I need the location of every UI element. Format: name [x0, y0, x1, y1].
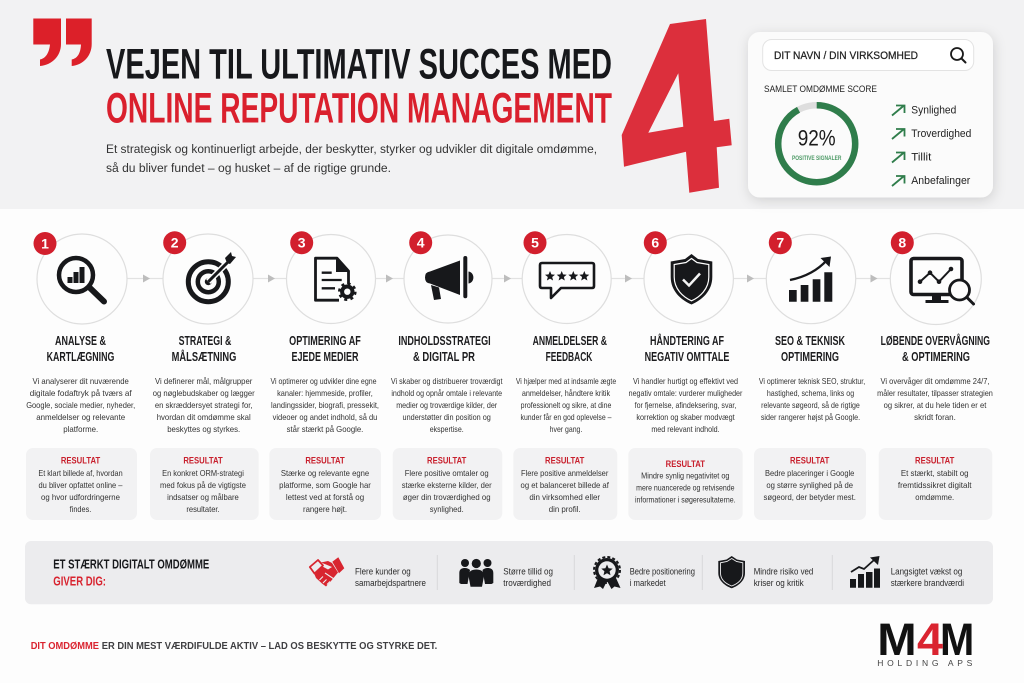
number badge 4	[409, 231, 432, 254]
result box: RESULTAT	[666, 459, 705, 469]
step description: platforme.	[63, 425, 98, 434]
step heading	[47, 334, 114, 364]
step heading	[398, 334, 491, 364]
icon: document with gear	[316, 258, 355, 300]
step description: står stærkt på Google.	[287, 424, 363, 434]
step heading: NEGATIV OMTTALE	[645, 350, 729, 364]
benefit: risiko: Mindre risiko ved	[754, 566, 813, 576]
benefit: tillid: Større tillid og	[503, 566, 553, 576]
benefit: kunder	[310, 557, 426, 588]
result box: mere nuancerede og retvisende	[636, 484, 735, 493]
benefit: positionering: i markedet	[630, 578, 666, 588]
icon: target with arrow	[188, 252, 236, 302]
icon: shield with check	[671, 254, 712, 304]
number badge 5: 5	[531, 235, 539, 251]
step description: Vi optimerer og udvikler dine egne	[270, 377, 377, 386]
score label: SAMLET OMDØMME SCORE	[764, 84, 877, 95]
step heading: SEO & TEKNISK	[775, 334, 845, 348]
result box: synlighed.	[430, 505, 464, 514]
result box: din profil.	[549, 505, 581, 514]
step description: sider rangerer højst på Google.	[761, 412, 860, 422]
number badge 2	[163, 231, 186, 254]
step description: Vi handler hurtigt og effektivt ved	[633, 377, 738, 386]
step description: landingssider, biografi, pressekit,	[271, 401, 379, 410]
step heading	[881, 333, 990, 364]
icon: rosette with star	[594, 557, 620, 589]
result box: din virksomhed eller	[529, 493, 600, 502]
band heading: GIVER DIG:	[53, 575, 106, 589]
step description	[629, 377, 743, 434]
intro text	[106, 142, 597, 175]
step heading: ANMELDELSER &	[533, 334, 607, 348]
arrow 3 to 4	[375, 274, 405, 282]
search field	[763, 40, 974, 70]
logo M4M Holding ApS: HOLDING APS	[877, 658, 973, 668]
icon: speech bubble with stars	[540, 263, 594, 298]
logo M4M Holding ApS	[877, 614, 974, 668]
step heading: EJEDE MEDIER	[292, 350, 358, 364]
icon: people	[459, 559, 493, 587]
result box: RESULTAT	[790, 455, 830, 465]
signal list	[892, 104, 971, 187]
panel: step 3 ejede medier	[269, 231, 381, 520]
panel: reputation score card	[748, 32, 993, 198]
panel: step 2 strategi	[150, 231, 259, 520]
step description: Vi definerer mål, målgrupper	[155, 376, 253, 386]
step heading: HÅNDTERING AF	[650, 333, 724, 348]
arrow 4 to 5	[491, 274, 523, 282]
panel: step 1 analyse	[26, 232, 137, 520]
result box: Stærke og relevante egne	[281, 469, 370, 478]
step heading: INDHOLDSSTRATEGI	[398, 334, 491, 348]
intro text: så du bliver fundet – og husket – af de rigtige grunde.	[106, 161, 391, 175]
title: VEJEN TIL ULTIMATIV SUCCES MED	[106, 41, 612, 88]
panel: step 5 anmeldelser	[513, 231, 617, 520]
result box: indsatser og målbare	[167, 492, 239, 502]
step heading: & DIGITAL PR	[413, 350, 475, 364]
result box: RESULTAT	[305, 455, 345, 465]
signal: Tillit: Tillit	[911, 152, 931, 164]
footer tagline: DIT OMDØMME	[31, 641, 99, 652]
benefit: vækst: stærkere brandværdi	[891, 578, 964, 588]
step description: korrektion og skaber modvægt	[636, 413, 735, 422]
header panel	[0, 0, 1024, 209]
step description	[270, 377, 379, 434]
step description: understøtter din position og	[403, 413, 491, 422]
step heading: & OPTIMERING	[902, 350, 970, 364]
step heading	[645, 333, 729, 364]
step heading: STRATEGI &	[179, 334, 231, 348]
result box: resultater.	[186, 505, 220, 514]
result box: Mindre synlig negativitet og	[641, 472, 730, 481]
result box: RESULTAT	[915, 455, 955, 465]
benefit: risiko: kriser og kritik	[754, 578, 804, 588]
number badge 2: 2	[171, 235, 179, 251]
panel: step 8 overvågning	[877, 231, 993, 520]
number badge 6	[644, 231, 667, 254]
arrow 2 to 3	[253, 274, 287, 282]
icon: red quotation mark	[33, 18, 92, 66]
step description: hastighed, schema, links og	[767, 389, 855, 398]
result box	[26, 448, 137, 520]
logo M4M Holding ApS: M	[877, 614, 917, 665]
step description: en skræddersyet strategi for,	[155, 401, 253, 410]
step description	[26, 377, 135, 434]
step description: videoer og andet indhold, så du	[273, 412, 378, 422]
result box: RESULTAT	[183, 455, 223, 465]
result box: du bliver opfattet online –	[38, 481, 123, 490]
result box: og hvor udfordringerne	[41, 493, 120, 502]
panel: benefits band	[25, 541, 993, 604]
result box: og et balanceret billede af	[521, 481, 610, 490]
arrow 6 to 7	[733, 274, 766, 282]
benefit: risiko	[718, 556, 813, 588]
signal: Troverdighed: Troverdighed	[911, 128, 971, 140]
result box: Et klart billede af, hvordan	[38, 469, 123, 478]
footer tagline: ER DIN MEST VÆRDIFULDE AKTIV – LAD OS BESKYTTE OG STYRKE DET.	[102, 641, 438, 652]
benefit: tillid	[459, 559, 553, 588]
step description: og sikrer, at du hele tiden er et	[884, 401, 987, 410]
number badge 8	[891, 231, 914, 254]
search field: DIT NAVN / DIN VIRKSOMHED	[774, 50, 918, 62]
step description: anmeldelser og relevante	[36, 413, 126, 422]
step description: relevante søgeord, så de rigtige	[761, 400, 860, 410]
step heading: FEEDBACK	[546, 350, 592, 364]
logo M4M Holding ApS: M	[940, 614, 974, 665]
icon: handshake	[310, 557, 344, 586]
step description: Vi optimerer teknisk SEO, struktur,	[759, 377, 865, 386]
benefit: positionering: Bedre positionering	[630, 566, 695, 576]
result box: RESULTAT	[61, 455, 101, 465]
step description: Google, sociale medier, nyheder,	[26, 401, 135, 410]
number badge 3: 3	[298, 235, 306, 251]
donut chart 92%: POSITIVE SIGNALER	[792, 155, 842, 162]
benefit: vækst	[850, 556, 964, 588]
result box: Et stærkt, stabilt og	[901, 469, 969, 478]
result box: med fokus på de vigtigste	[160, 480, 246, 490]
step description: professionelt og sikre, at dine	[521, 401, 612, 410]
step description: Vi overvåger dit omdømme 24/7,	[880, 376, 990, 386]
arrow 5 to 6	[611, 274, 644, 282]
number badge 7: 7	[776, 235, 784, 251]
panel: step 4 indholdsstrategi	[391, 231, 503, 520]
result box	[879, 448, 992, 520]
icon: rising bars with arrow	[789, 256, 832, 302]
result box: Flere positive omtaler og	[405, 469, 489, 478]
icon: megaphone	[425, 256, 473, 300]
number badge 8: 8	[898, 235, 906, 251]
step description	[516, 377, 617, 434]
arrow 1 to 2	[127, 274, 163, 282]
step heading	[172, 334, 236, 364]
benefit: kunder: samarbejdspartnere	[355, 578, 426, 588]
icon: growth chart	[850, 556, 880, 588]
step heading	[289, 334, 361, 364]
step description: digitale fodaftryk på tværs af	[30, 388, 132, 398]
signal: Anbefalinger: Anbefalinger	[911, 175, 971, 187]
arrow 7 to 8	[856, 274, 890, 282]
result box: rangere højt.	[303, 505, 347, 514]
step description	[391, 377, 503, 434]
result box: En konkret ORM-strategi	[162, 469, 244, 478]
step description: og nøglebudskaber og lægger	[153, 389, 255, 398]
benefit: positionering	[594, 557, 695, 589]
result box: RESULTAT	[545, 455, 585, 465]
result box	[269, 448, 381, 520]
panel: step 7 seo	[754, 231, 866, 520]
big red number 4	[622, 19, 732, 193]
result box: stærke eksterne kilder, der	[402, 481, 492, 490]
step description	[877, 376, 993, 422]
number badge 7	[769, 231, 792, 254]
step description: skridt foran.	[914, 413, 956, 422]
step heading	[533, 334, 607, 364]
number badge 5	[524, 231, 546, 254]
donut chart 92%	[778, 105, 855, 182]
step heading	[775, 334, 845, 364]
step description: ekspertise.	[430, 425, 464, 434]
step description: negativ omtale: vurderer muligheder	[629, 389, 743, 398]
result box	[628, 448, 743, 520]
step description: indhold og opnår omtale i relevante	[391, 388, 502, 398]
step heading: OPTIMERING AF	[289, 334, 361, 348]
step heading: KARTLÆGNING	[47, 350, 114, 364]
result box: fremtidssikret digitalt	[898, 481, 972, 490]
step description: kanaler: hjemmeside, profiler,	[277, 389, 373, 398]
step heading: OPTIMERING	[781, 350, 839, 364]
result box: øger din troværdighed og	[403, 493, 491, 502]
step description: anmeldelser, håndtere kritik	[522, 388, 611, 398]
band heading: ET STÆRKT DIGITALT OMDØMME	[53, 557, 209, 571]
result box: søgeord, der betyder mest.	[764, 493, 856, 502]
step description: beskyttes og styrkes.	[167, 425, 240, 434]
number badge 4: 4	[417, 235, 425, 251]
result box: og større synlighed på de	[766, 480, 853, 490]
step description: for fjernelse, afindeksering, svar,	[635, 401, 736, 410]
result box: RESULTAT	[427, 455, 467, 465]
result box	[393, 448, 502, 520]
step description: kunder får en god oplevelse –	[520, 412, 612, 422]
step heading: ANALYSE &	[55, 334, 106, 348]
donut chart 92%: 92%	[798, 126, 836, 151]
icon: monitor with chart and magnifier	[911, 258, 974, 304]
result box: omdømme.	[915, 493, 954, 502]
step description: Vi hjælper med at indsamle ægte	[516, 377, 617, 386]
signal: Synlighed: Synlighed	[911, 104, 956, 116]
number badge 3	[290, 231, 313, 254]
benefit: kunder: Flere kunder og	[355, 566, 411, 576]
step description: Vi analyserer dit nuværende	[33, 377, 129, 386]
logo M4M Holding ApS: 4	[917, 614, 943, 665]
result box	[513, 448, 617, 520]
step description: hver gang.	[550, 425, 582, 434]
result box: findes.	[70, 505, 91, 514]
result box: informationer i søgeresultaterne.	[635, 496, 736, 505]
benefit: vækst: Langsigtet vækst og	[891, 566, 962, 576]
number badge 6: 6	[651, 235, 659, 251]
benefit: tillid: troværdighed	[503, 578, 551, 588]
panel: step 6 negativ omtale	[628, 231, 743, 520]
step description	[153, 376, 255, 434]
result box: Flere positive anmeldelser	[521, 469, 609, 478]
result box: lettest ved at forstå og	[286, 492, 365, 502]
band heading	[53, 557, 209, 589]
result box: platforme, som Google har	[279, 481, 371, 490]
step description	[759, 377, 865, 422]
result box: Bedre placeringer i Google	[765, 469, 855, 478]
intro text: Et strategisk og kontinuerligt arbejde, der beskytter, styrker og udvikler dit digitale omdømme,	[106, 142, 597, 156]
step description: medier og troværdige kilder, der	[396, 401, 497, 410]
result box	[150, 448, 259, 520]
step description: med relevant indhold.	[651, 425, 720, 434]
step heading: MÅLSÆTNING	[172, 349, 236, 364]
step description: hvordan dit omdømme skal	[157, 413, 251, 422]
title: ONLINE REPUTATION MANAGEMENT	[106, 86, 612, 133]
number badge 1	[34, 232, 56, 255]
icon: magnifier with bars	[59, 258, 104, 302]
number badge 1: 1	[41, 236, 49, 252]
result box	[754, 448, 866, 520]
step description: måler resultater, tilpasser strategien	[877, 388, 993, 398]
title	[106, 41, 612, 133]
icon: shield	[718, 556, 745, 588]
step description: Vi skaber og distribuerer troværdigt	[391, 377, 503, 386]
